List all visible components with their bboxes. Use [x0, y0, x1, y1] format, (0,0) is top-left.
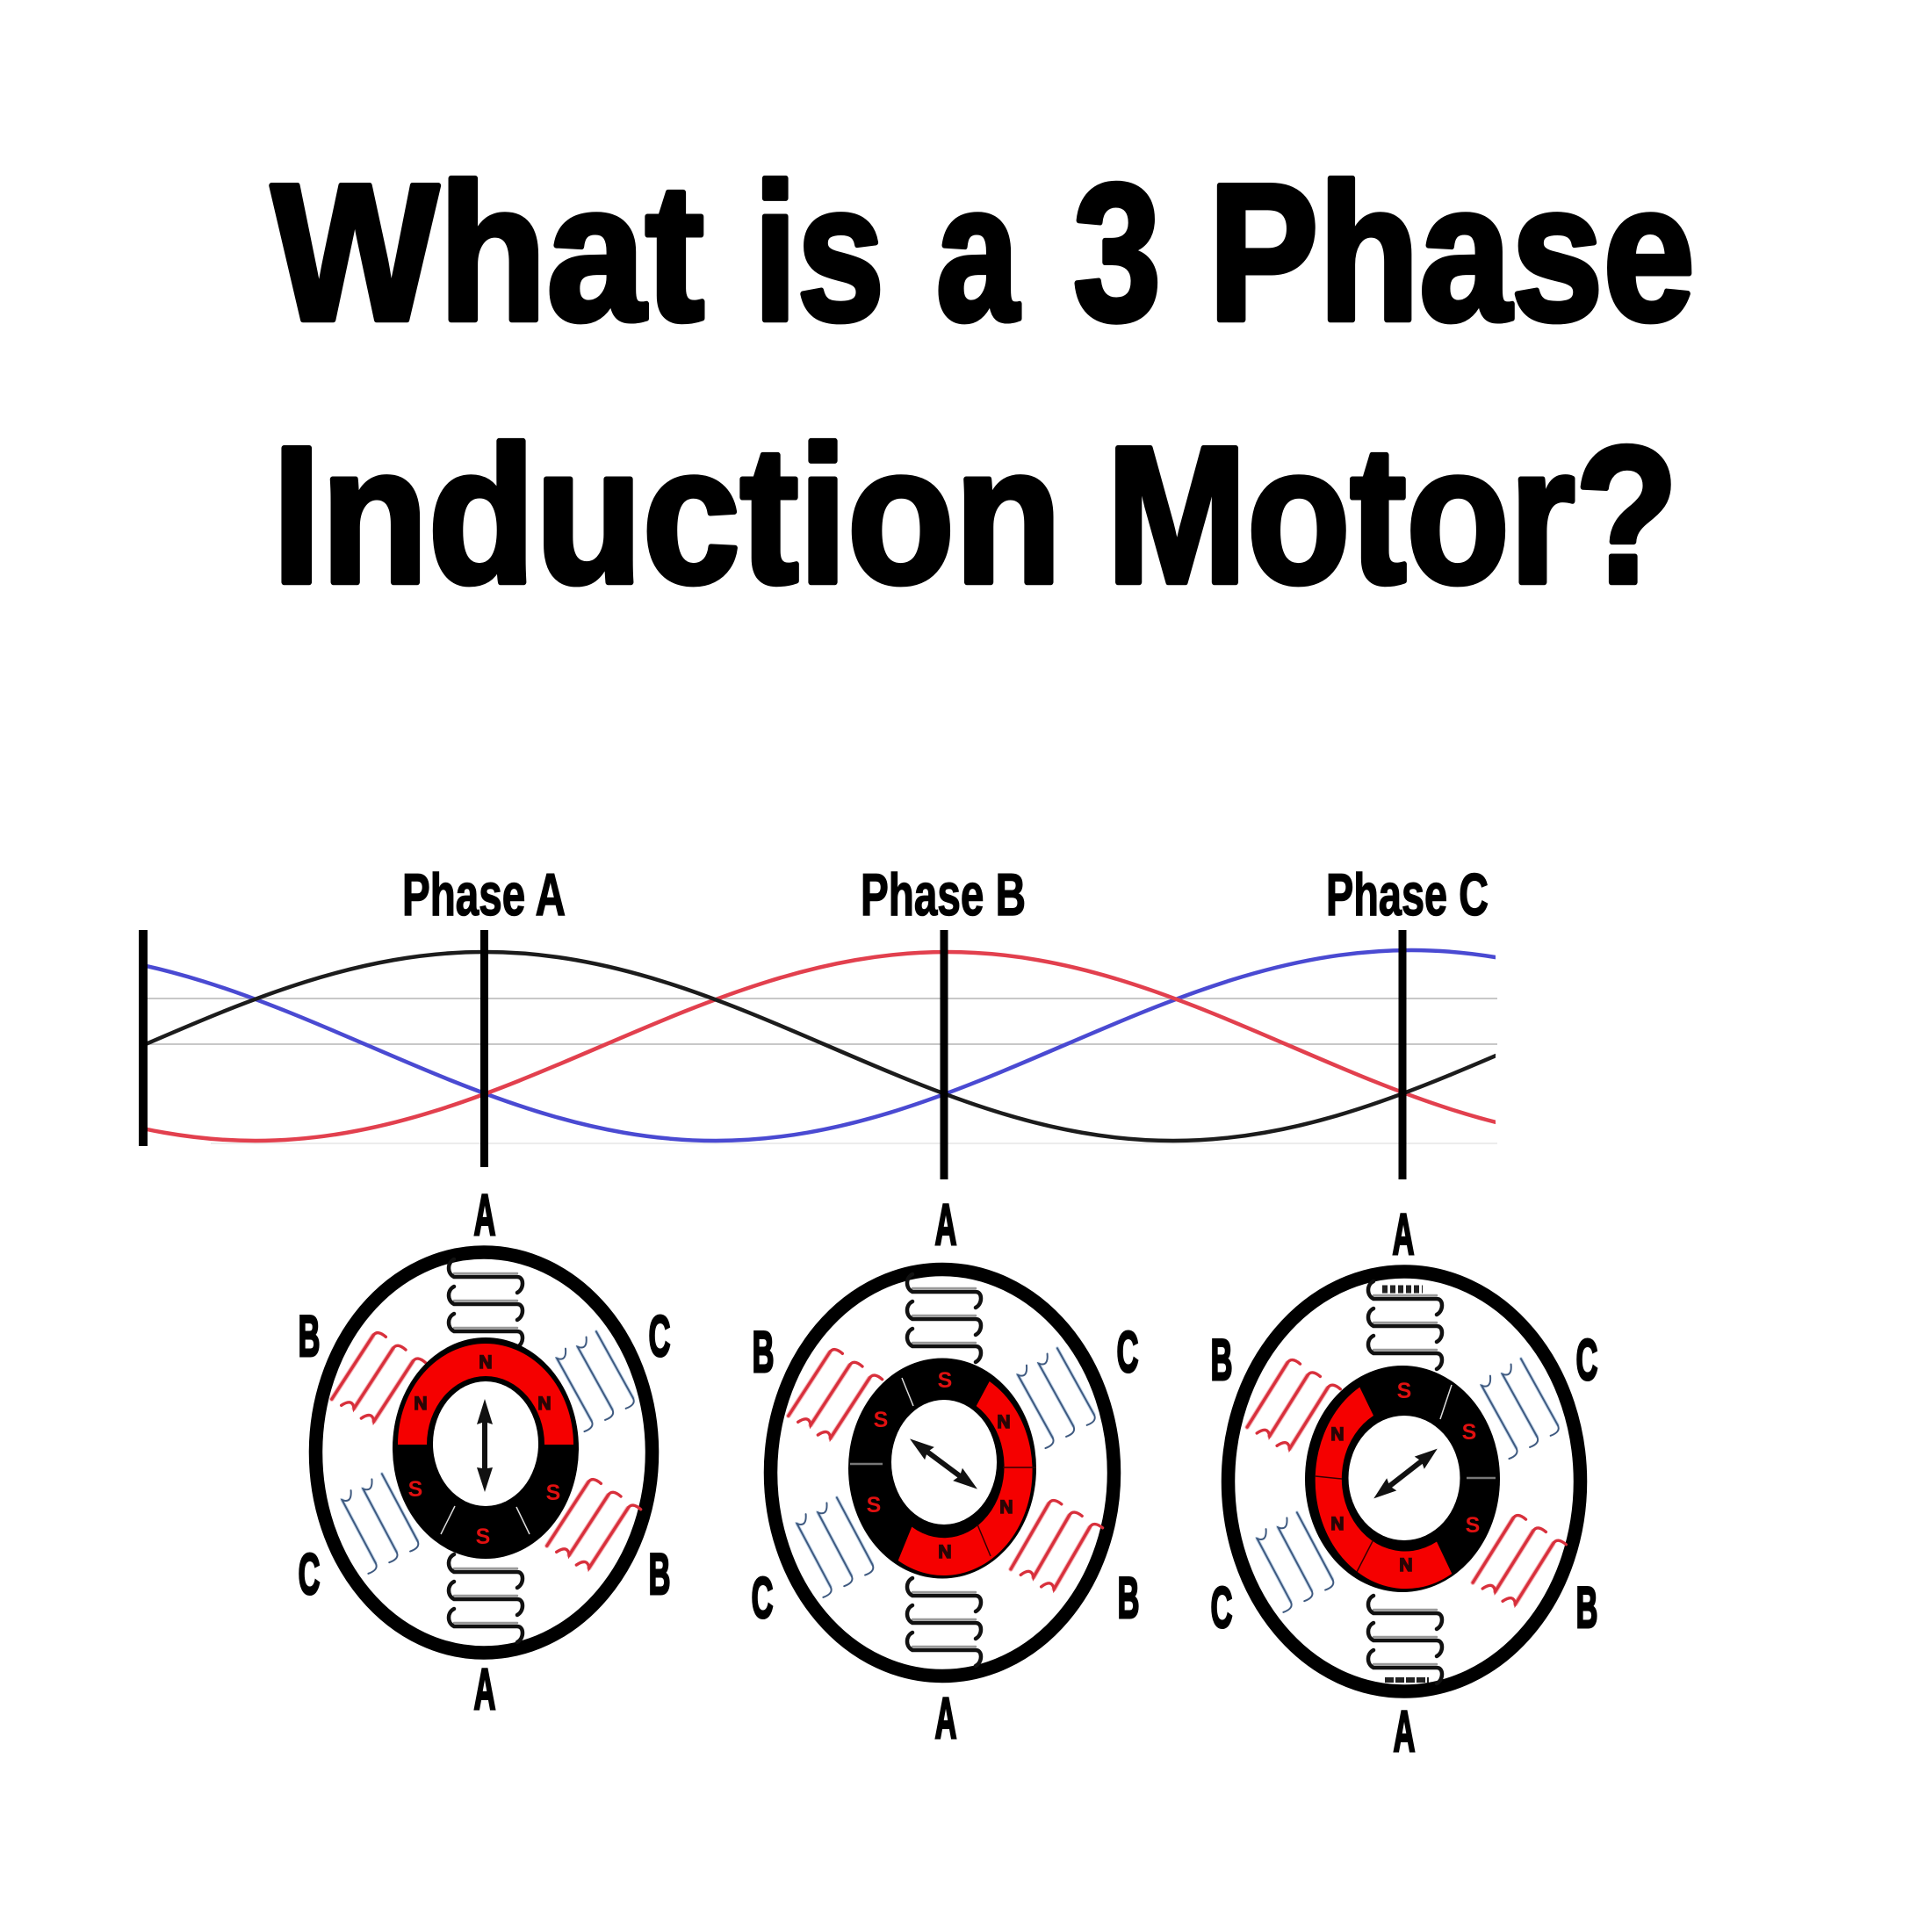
pole letters: S	[1397, 1379, 1411, 1403]
pole letters: N	[1399, 1555, 1413, 1575]
pole letters: N	[1330, 1424, 1344, 1445]
pole letters: S	[867, 1493, 881, 1517]
red north half	[398, 1344, 573, 1445]
label: Phase A: Phase A	[402, 861, 566, 928]
vertical phase markers	[139, 930, 1407, 1179]
pole letters: S	[408, 1477, 422, 1502]
pole letters: S	[938, 1368, 952, 1393]
sine waves	[148, 948, 1496, 1143]
coil: C upper right	[1469, 1359, 1561, 1459]
title line 1: Phase	[1208, 144, 1695, 362]
coil letters: A	[935, 1686, 956, 1751]
arrow: field direction	[477, 1399, 493, 1492]
coil letters: B	[753, 1320, 774, 1385]
coil: C upper right	[544, 1331, 636, 1431]
coil: A bottom	[1368, 1596, 1442, 1683]
coil: B lower right	[1473, 1513, 1566, 1614]
coil: A top	[449, 1259, 523, 1347]
coil letters: A	[935, 1193, 956, 1258]
coil letters: B	[1576, 1575, 1597, 1640]
title line 2: Induction	[272, 407, 1062, 624]
pole letters: S	[874, 1408, 888, 1432]
pole letters	[408, 1352, 560, 1549]
coil: C lower left	[1245, 1512, 1336, 1612]
red wave	[148, 950, 1496, 1143]
Phase C marker	[1398, 930, 1407, 1179]
coil: B upper left	[332, 1330, 426, 1431]
stator ring	[771, 1270, 1114, 1676]
coil letters	[752, 1193, 1139, 1751]
coil letters: C	[1211, 1575, 1232, 1640]
coil: B upper left	[789, 1347, 883, 1448]
title	[271, 144, 1695, 624]
coil letters: A	[474, 1657, 495, 1722]
coil: A bottom	[907, 1578, 981, 1666]
coil letters: B	[299, 1304, 320, 1369]
stator ring	[316, 1252, 652, 1653]
coil letters: C	[1576, 1328, 1597, 1393]
black wave	[148, 950, 1496, 1143]
pole letters: N	[479, 1352, 493, 1373]
coil: C upper right	[1006, 1348, 1097, 1448]
start marker	[139, 930, 148, 1146]
pole letters: S	[1462, 1420, 1476, 1445]
pole letters: N	[537, 1394, 551, 1414]
title line 2: Motor?	[1107, 407, 1678, 624]
phase labels	[402, 861, 1489, 928]
coil letters	[299, 1183, 670, 1722]
label: Phase C: Phase C	[1326, 861, 1489, 928]
coil letters: A	[1394, 1699, 1415, 1764]
pole letters: N	[1330, 1514, 1344, 1534]
pole letters: N	[997, 1412, 1011, 1432]
label: Phase B: Phase B	[861, 861, 1026, 928]
stator ring	[1228, 1272, 1581, 1691]
coil: B lower right	[1011, 1498, 1103, 1598]
rotor	[393, 1337, 579, 1559]
pole letters	[867, 1368, 1013, 1562]
rotor	[848, 1358, 1036, 1579]
coil: C lower left	[785, 1497, 876, 1597]
rotor	[1305, 1366, 1500, 1592]
coil letters: C	[299, 1542, 320, 1607]
red north half	[1316, 1388, 1452, 1589]
coil: A top	[907, 1274, 981, 1362]
coil letters: B	[649, 1542, 670, 1607]
coil: A bottom	[449, 1554, 523, 1642]
coil letters: B	[1118, 1566, 1139, 1631]
motor diagram 2	[752, 1193, 1139, 1751]
Phase B marker	[940, 930, 948, 1179]
pole letters	[1330, 1379, 1480, 1575]
blue wave	[148, 948, 1496, 1143]
motor diagram 3	[1211, 1202, 1597, 1764]
red north half	[898, 1381, 1033, 1575]
title line 1: a	[936, 144, 1020, 362]
coil letters	[1211, 1202, 1597, 1764]
pole letters: N	[999, 1497, 1013, 1517]
coil: B upper left	[1247, 1358, 1340, 1459]
coil: A top	[1368, 1281, 1442, 1369]
coil letters: A	[474, 1183, 495, 1248]
pole letters: S	[546, 1481, 560, 1505]
arrow: field direction	[1369, 1443, 1442, 1504]
title line 1: 3	[1073, 144, 1161, 362]
coil: C lower left	[330, 1474, 421, 1574]
Phase A marker	[480, 930, 488, 1167]
coil: B lower right	[547, 1477, 641, 1578]
coil letters: B	[1211, 1328, 1232, 1393]
pole letters: N	[414, 1394, 428, 1414]
phase waveform chart	[139, 871, 1497, 1179]
pole letters: S	[476, 1525, 490, 1549]
coil letters: C	[752, 1566, 773, 1631]
title line 1: What	[271, 144, 704, 362]
motor diagram 1	[299, 1183, 670, 1722]
coil letters: C	[649, 1304, 670, 1369]
pole letters: S	[1466, 1513, 1480, 1538]
pole letters: N	[938, 1542, 952, 1562]
arrow: field direction	[905, 1432, 982, 1496]
title line 1: is	[753, 144, 884, 362]
coil letters: A	[1393, 1202, 1414, 1267]
coil letters: C	[1117, 1320, 1138, 1385]
